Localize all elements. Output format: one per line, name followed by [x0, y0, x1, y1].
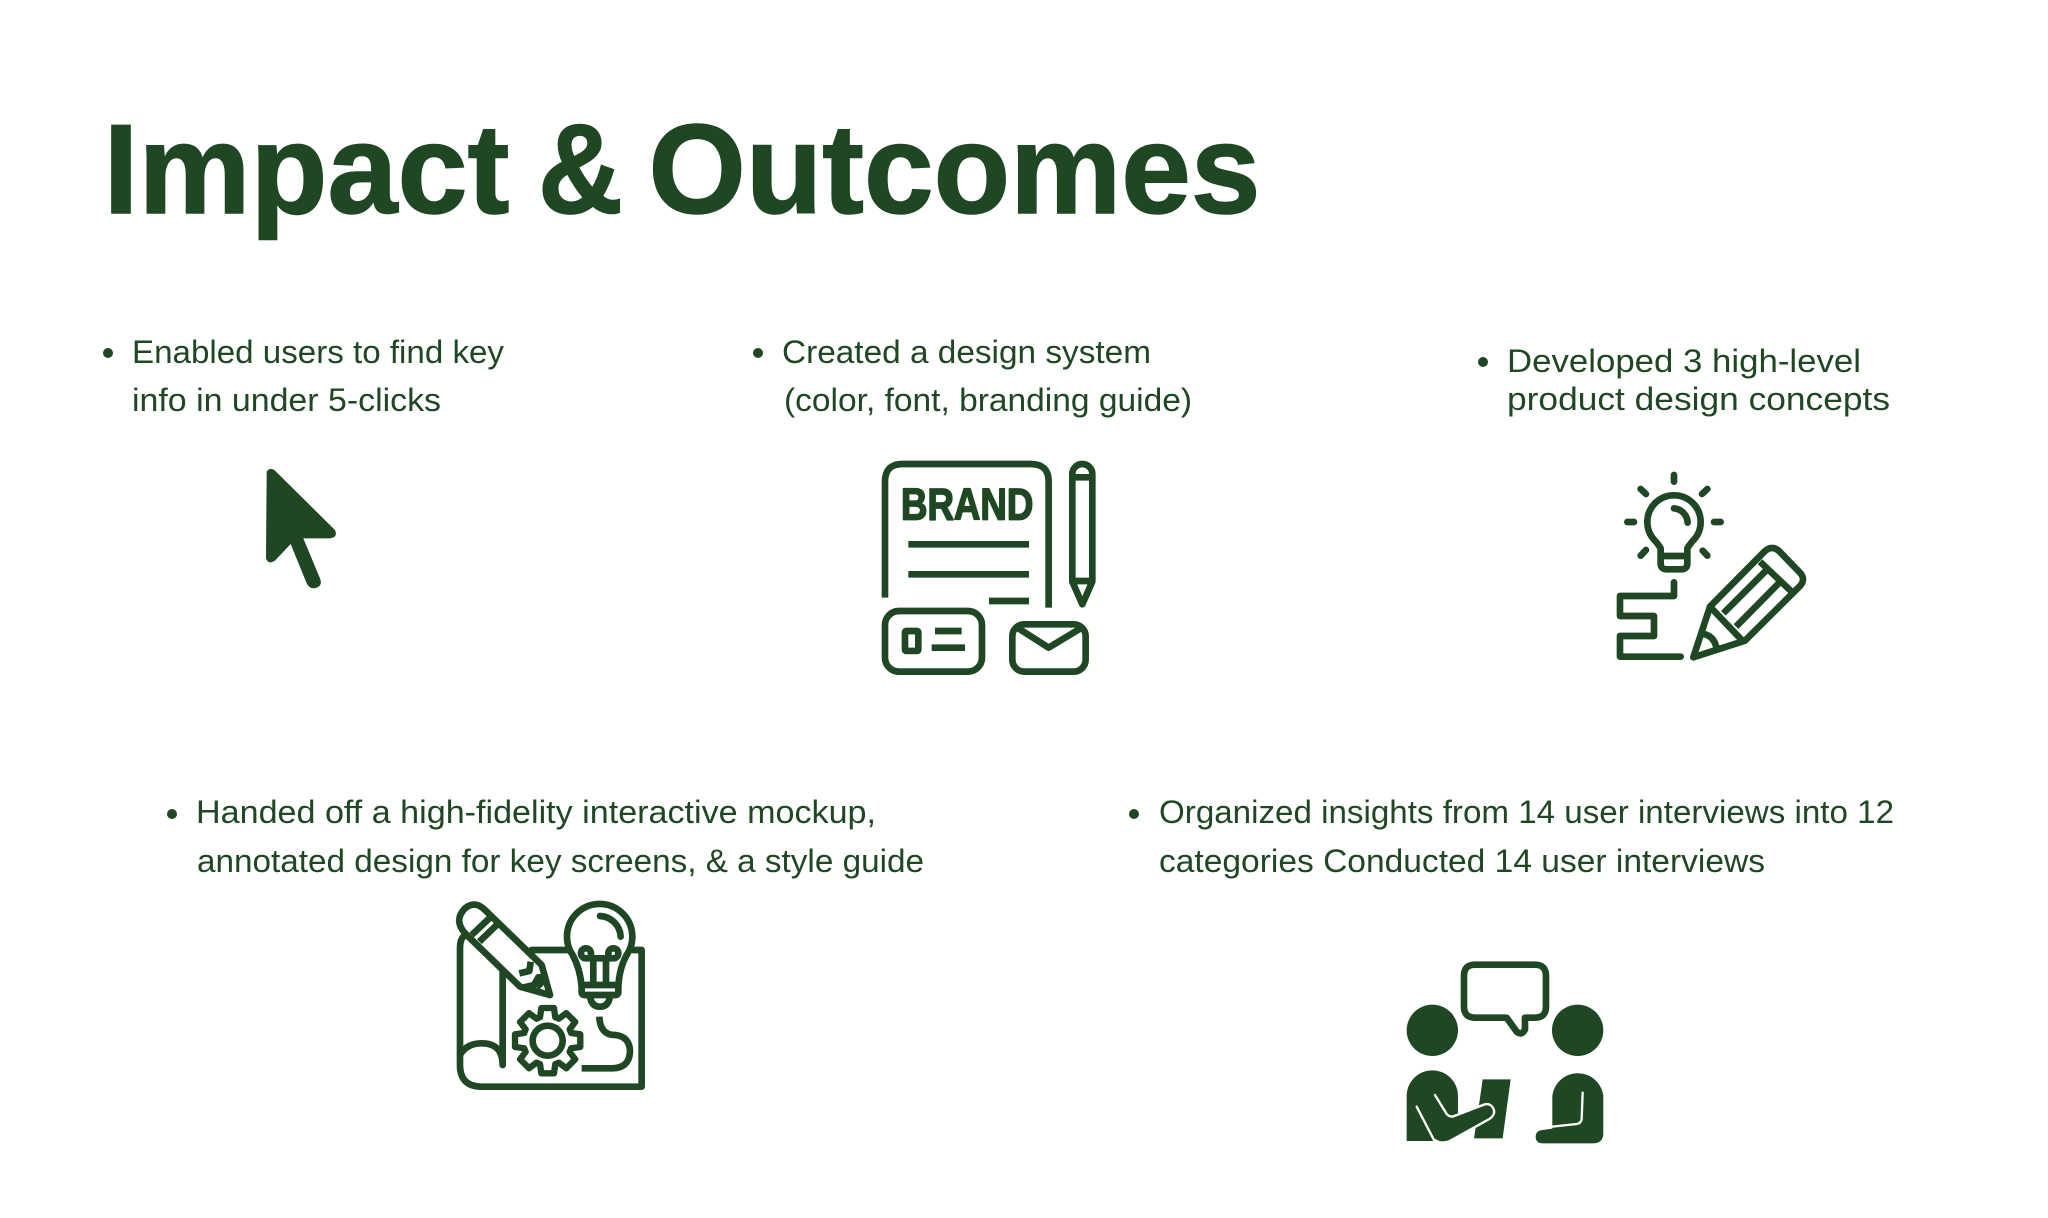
text block: Organized insights from 14 user interviews into 12	[1159, 794, 1894, 830]
text block	[132, 334, 504, 418]
title: &	[538, 98, 623, 240]
text block: annotated design for key screens, & a style guide	[197, 843, 924, 879]
icon: brand kit: BRAND	[901, 480, 1033, 529]
panel: navigation outcome	[103, 334, 504, 588]
title: Outcomes	[648, 98, 1260, 240]
title: Impact	[104, 98, 510, 240]
text block: Developed 3 high-level	[1507, 343, 1861, 379]
bullet	[103, 348, 113, 358]
text block: Enabled users to find key	[132, 334, 504, 370]
icon: lightbulb and pencil	[1620, 475, 1803, 657]
panel: concepts outcome	[1478, 343, 1890, 657]
icon: blueprint	[459, 904, 642, 1087]
icon: brand kit	[885, 464, 1092, 672]
icon: cursor	[266, 469, 336, 588]
text block: info in under 5-clicks	[132, 382, 441, 418]
text block: (color, font, branding guide)	[784, 382, 1192, 418]
text block: categories Conducted 14 user interviews	[1159, 843, 1765, 879]
panel: interviews outcome	[1129, 794, 1894, 1143]
panel: handoff outcome	[167, 794, 924, 1087]
bullet	[753, 348, 763, 358]
bullet	[1129, 809, 1139, 819]
bullet	[1478, 357, 1488, 367]
bullet	[167, 809, 177, 819]
text block	[196, 794, 924, 879]
panel: design system outcome	[753, 334, 1192, 672]
title	[104, 98, 1260, 240]
text block	[1507, 343, 1890, 417]
icon: two people talking	[1407, 965, 1603, 1143]
text block: Created a design system	[782, 334, 1151, 370]
text block: product design concepts	[1507, 381, 1890, 417]
text block	[782, 334, 1192, 418]
text block	[1159, 794, 1894, 879]
text block: Handed off a high-fidelity interactive mockup,	[196, 794, 876, 830]
